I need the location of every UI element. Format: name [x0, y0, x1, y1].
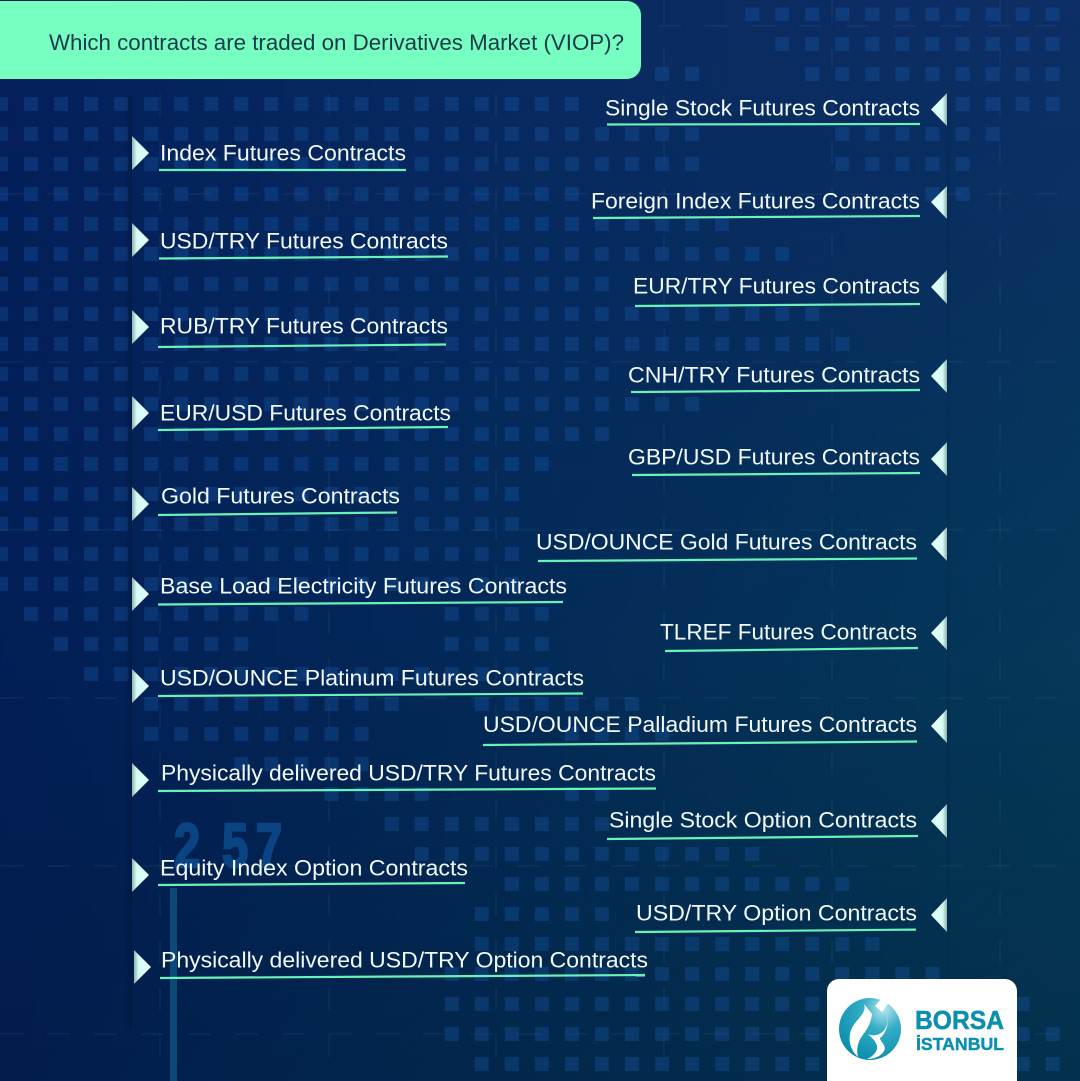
item: Gold Futures Contracts: Gold Futures Contracts	[161, 484, 400, 508]
item: USD/TRY Futures Contracts	[132, 223, 448, 258]
item: USD/TRY Futures Contracts: USD/TRY Futures Contracts	[160, 228, 448, 254]
brand name: BORSA	[915, 1005, 1004, 1035]
item: USD/OUNCE Gold Futures Contracts: USD/OUNCE Gold Futures Contracts	[536, 530, 917, 554]
item: Foreign Index Futures Contracts: Foreign Index Futures Contracts	[591, 188, 920, 214]
item: RUB/TRY Futures Contracts	[132, 310, 448, 347]
item: Single Stock Futures Contracts: Single Stock Futures Contracts	[605, 96, 920, 120]
title banner	[0, 1, 641, 79]
item: Physically delivered USD/TRY Futures Contracts: Physically delivered USD/TRY Futures Contracts	[161, 760, 656, 786]
item: Equity Index Option Contracts: Equity Index Option Contracts	[160, 856, 468, 880]
title banner: Which contracts are traded on Derivatives Market (VIOP)?	[49, 30, 624, 55]
item: USD/OUNCE Palladium Futures Contracts: USD/OUNCE Palladium Futures Contracts	[483, 712, 917, 737]
item: EUR/TRY Futures Contracts	[633, 270, 947, 306]
item: EUR/USD Futures Contracts	[132, 396, 451, 430]
item: USD/OUNCE Palladium Futures Contracts	[483, 709, 947, 745]
logo card: Borsa Istanbul	[827, 979, 1017, 1081]
item: Base Load Electricity Futures Contracts: Base Load Electricity Futures Contracts	[160, 574, 567, 598]
item: Foreign Index Futures Contracts	[591, 186, 947, 219]
item: CNH/TRY Futures Contracts	[628, 359, 947, 393]
decorative chart number	[174, 811, 282, 881]
item: Single Stock Option Contracts	[607, 804, 947, 839]
decorative chart bar	[170, 888, 177, 1081]
item: Equity Index Option Contracts	[132, 856, 468, 892]
item: Single Stock Option Contracts: Single Stock Option Contracts	[609, 808, 917, 832]
item: Base Load Electricity Futures Contracts	[132, 574, 567, 611]
decorative chart number: 7	[256, 811, 282, 881]
item: TLREF Futures Contracts: TLREF Futures Contracts	[660, 620, 917, 644]
decorative chart number: 2	[174, 811, 200, 881]
item: USD/OUNCE Platinum Futures Contracts: USD/OUNCE Platinum Futures Contracts	[160, 666, 584, 690]
item: USD/TRY Option Contracts	[635, 898, 947, 932]
item: TLREF Futures Contracts	[660, 616, 947, 651]
item: GBP/USD Futures Contracts: GBP/USD Futures Contracts	[628, 444, 920, 470]
item: USD/OUNCE Gold Futures Contracts	[536, 527, 947, 561]
item: Index Futures Contracts: Index Futures Contracts	[160, 140, 406, 166]
item: CNH/TRY Futures Contracts: CNH/TRY Futures Contracts	[628, 362, 920, 388]
item: Single Stock Futures Contracts	[605, 93, 947, 126]
decorative chart number: 5	[222, 811, 248, 881]
item: USD/TRY Option Contracts: USD/TRY Option Contracts	[636, 900, 917, 926]
item: EUR/TRY Futures Contracts: EUR/TRY Futures Contracts	[633, 274, 920, 298]
item: Index Futures Contracts	[132, 136, 406, 170]
item: USD/OUNCE Platinum Futures Contracts	[132, 666, 584, 703]
item: EUR/USD Futures Contracts: EUR/USD Futures Contracts	[160, 400, 451, 426]
item: Gold Futures Contracts	[132, 484, 400, 521]
item: RUB/TRY Futures Contracts: RUB/TRY Futures Contracts	[160, 314, 448, 338]
icon: Borsa Istanbul emblem	[839, 998, 901, 1060]
item: Physically delivered USD/TRY Option Contracts	[134, 948, 648, 984]
brand city: İSTANBUL	[916, 1034, 1004, 1054]
item: Physically delivered USD/TRY Futures Contracts	[132, 760, 656, 797]
item: GBP/USD Futures Contracts	[628, 442, 947, 476]
item: Physically delivered USD/TRY Option Contracts: Physically delivered USD/TRY Option Contracts	[161, 948, 648, 972]
